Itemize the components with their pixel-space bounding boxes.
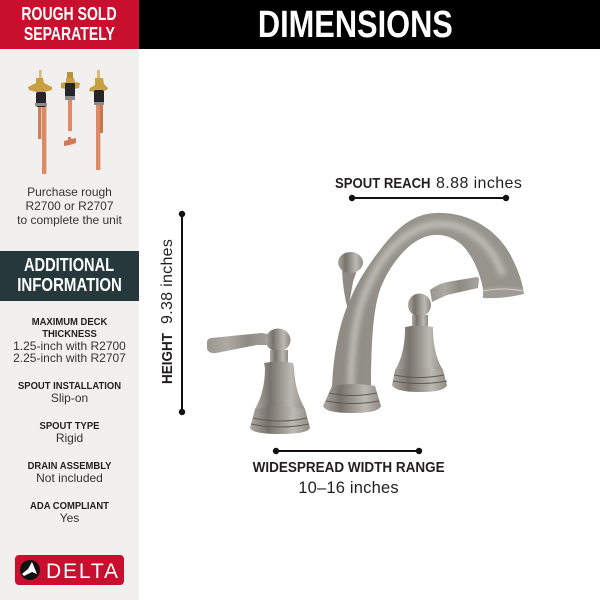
spec: deck thickness: 2.25-inch with R2707 xyxy=(13,351,126,365)
banner: additional information: INFORMATION xyxy=(17,274,122,295)
banner: additional information: ADDITIONAL xyxy=(24,254,115,275)
banner: additional information xyxy=(0,251,139,301)
spec: drain assembly: Not included xyxy=(36,471,103,485)
spec: spout type: Rigid xyxy=(56,431,83,445)
arrow: spout reach line xyxy=(348,194,510,202)
logo: delta xyxy=(15,555,124,585)
spec: drain assembly: DRAIN ASSEMBLY xyxy=(28,460,111,472)
label: width xyxy=(252,459,445,497)
arrow: width line xyxy=(272,448,422,454)
spec: ada compliant: ADA COMPLIANT xyxy=(30,500,109,512)
label: width: WIDESPREAD WIDTH RANGE xyxy=(252,459,445,476)
spec: ada compliant: Yes xyxy=(60,511,79,525)
spec: deck thickness xyxy=(13,316,126,365)
banner: rough sold separately: SEPARATELY xyxy=(24,24,115,44)
spec: deck thickness: 1.25-inch with R2700 xyxy=(13,339,126,353)
label: spout reach: SPOUT REACH xyxy=(335,175,431,192)
label: width: 10–16 inches xyxy=(298,479,399,497)
spec: spout installation: Slip-on xyxy=(51,391,88,405)
spec: drain assembly xyxy=(28,460,112,485)
illustration: rough valves xyxy=(28,70,108,174)
banner: rough sold separately: ROUGH SOLD xyxy=(22,4,117,24)
spec: spout type: SPOUT TYPE xyxy=(40,420,99,432)
illustration: faucet xyxy=(207,212,524,434)
panel: header bar xyxy=(139,0,600,49)
panel: sidebar background xyxy=(0,0,139,600)
spec: spout installation xyxy=(18,380,121,405)
left handle xyxy=(207,328,310,434)
spout xyxy=(323,213,524,413)
label: spout reach: 8.88 inches xyxy=(436,175,522,192)
back handle post xyxy=(338,252,363,310)
label: height xyxy=(159,239,176,384)
dimension: widespread width xyxy=(252,448,445,497)
label: height: HEIGHT xyxy=(159,333,176,384)
spec: spout installation: SPOUT INSTALLATION xyxy=(18,380,121,392)
banner: rough sold separately xyxy=(0,0,139,49)
spec: deck thickness: THICKNESS xyxy=(42,328,97,340)
text: purchase rough xyxy=(17,185,122,227)
text: purchase rough: Purchase rough xyxy=(27,185,112,199)
dimension: height xyxy=(159,210,186,416)
text: purchase rough: R2700 or R2707 xyxy=(25,199,114,213)
label: height: 9.38 inches xyxy=(159,239,176,324)
spec: spout type xyxy=(40,420,100,445)
text: purchase rough: to complete the unit xyxy=(17,213,122,227)
spec: deck thickness: MAXIMUM DECK xyxy=(32,316,107,328)
logo: delta: DELTA xyxy=(46,560,118,583)
arrow: height line xyxy=(178,210,186,416)
spec: ada compliant xyxy=(30,500,109,525)
dimension: spout reach xyxy=(335,175,522,202)
heading: dimensions: DIMENSIONS xyxy=(258,4,452,46)
right handle xyxy=(392,277,479,392)
label: spout reach xyxy=(335,175,522,192)
